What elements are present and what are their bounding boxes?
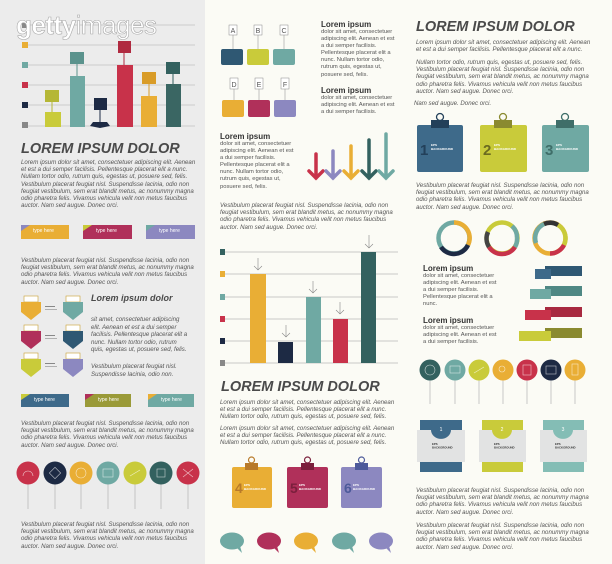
text block right 6 <box>423 316 496 345</box>
clipboards 4-6: BACKGROUND <box>244 487 267 491</box>
clipboards 4-6: 4 <box>235 480 243 496</box>
text: type here <box>34 397 55 403</box>
text block right 2: Vestibulum placerat feugiat nisl. Suspendisse lacinia, odio non <box>416 66 584 73</box>
text block mid 6: et est a dui semper facilisis. Pellentesque placerat elit a nunc. <box>220 432 386 439</box>
text block right 2 <box>416 59 589 95</box>
chart: 3D bar chart <box>22 22 195 128</box>
text block left 2: auctor. Nam sed augue. Donec orci. <box>21 279 118 286</box>
clipboards 1-3: EPS <box>494 143 500 147</box>
text block left 4: odio pharetra felis. Vivamus vehicula velit non metus faucibus <box>21 535 187 542</box>
text block right 4: odio pharetra felis. Vivamus vehicula velit non metus faucibus <box>416 196 582 203</box>
text: type here <box>33 228 54 234</box>
numbered cards: EPS <box>494 442 500 446</box>
text block right 3: Nam sed augue. Donec orci. <box>414 100 491 107</box>
text block mid 2: Lorem ipsum <box>321 86 371 95</box>
text block left 1: Vestibulum placerat feugiat nisl. Suspendisse lacinia, odio non <box>21 181 189 188</box>
text block right 5: dolor sit amet, consectetuer <box>423 273 494 279</box>
clipboards 1-3: 2 <box>483 142 491 159</box>
text block right 5: a dui semper facilisis. <box>423 287 478 293</box>
text block mid 3: posuere sed, felis. <box>220 184 267 190</box>
numbered cards <box>417 420 587 472</box>
text block right 5: Pellentesque placerat elit a <box>423 294 493 300</box>
left panel background <box>0 0 205 564</box>
text block left 1: odio pharetra felis. Vivamus vehicula velit non metus faucibus <box>21 195 187 202</box>
clipboards 1-3: 3 <box>545 142 553 159</box>
tag labels row 2 <box>34 397 182 403</box>
watermark: gettyimages <box>16 10 156 40</box>
text block mid 4: auctor. Nam sed augue. Donec orci. <box>220 224 317 231</box>
text block left 4 <box>21 521 194 550</box>
text block left 2: Vestibulum placerat feugiat nisl. Suspendisse lacinia, odio non <box>21 257 189 264</box>
middle bar chart <box>220 235 398 366</box>
text block right 5: Lorem ipsum <box>423 264 473 273</box>
clipboards 4-6: BACKGROUND <box>299 487 322 491</box>
text block right 4 <box>416 182 589 211</box>
text block left 3 <box>21 420 194 449</box>
text block right 7: auctor. Nam sed augue. Donec orci. <box>416 509 513 516</box>
cubes A-F: F <box>283 82 287 89</box>
text block right 5 <box>423 264 496 307</box>
text block right 1 <box>416 39 590 53</box>
text block right 2: odio pharetra felis. Vivamus vehicula velit non metus faucibus <box>416 81 582 88</box>
cubes A-F: B <box>256 28 261 35</box>
text block right 6: Lorem ipsum <box>423 316 473 325</box>
text block left 1: Lorem ipsum dolor sit amet, consectetuer adipiscing elit. Aenean <box>21 159 195 166</box>
numbered cards: EPS <box>555 442 561 446</box>
numbered cards: BACKGROUND <box>494 446 515 450</box>
down arrows <box>309 134 393 178</box>
text block mid 1: Pellentesque placerat elit a <box>321 50 391 56</box>
numbered cards: EPS <box>432 442 438 446</box>
subheading left: Lorem ipsum dolor <box>91 293 173 303</box>
clipboards 1-3 <box>417 114 589 172</box>
text block mid 2: a dui semper facilisis. <box>321 109 376 115</box>
clipboards 1-3: EPS <box>431 143 437 147</box>
cubes A-F: A <box>231 28 236 35</box>
text block right 7 <box>416 487 589 516</box>
text block left 4: feugiat vestibulum, sem erat blandit metus, ac nonummy magna <box>21 528 194 535</box>
text block mid 6: Nullam tortor odio, rutrum quis, egestas ut, posuere sed, felis. <box>220 439 386 446</box>
clipboards 4-6: EPS <box>299 483 305 487</box>
shield icons <box>21 296 83 377</box>
text block right 2: feugiat vestibulum, sem erat blandit metus, ac nonummy magna <box>416 73 589 80</box>
text block mid 2 <box>321 86 394 115</box>
text block right 7: feugiat vestibulum, sem erat blandit metus, ac nonummy magna <box>416 494 589 501</box>
tag labels row 1 <box>33 228 180 234</box>
ribbons <box>519 266 582 341</box>
ring charts <box>438 222 566 254</box>
text block right 4: Vestibulum placerat feugiat nisl. Suspendisse lacinia, odio non <box>416 182 584 189</box>
text block mid 1: adipiscing elit. Aenean et est <box>321 36 394 42</box>
text block mid 3: dolor sit amet, consectetuer <box>220 141 291 147</box>
text block mid 1: posuere sed, felis. <box>321 72 368 78</box>
text block right 8: Vestibulum placerat feugiat nisl. Suspendisse lacinia, odio non <box>416 522 584 529</box>
text block mid 1: rutrum quis, egestas ut, <box>321 64 382 70</box>
text block mid 4: odio pharetra felis. Vivamus vehicula velit non metus faucibus <box>220 216 386 223</box>
text block mid 3: rutrum quis, egestas ut, <box>220 176 281 182</box>
text block mid 5: et est a dui semper facilisis. Pellentesque placerat elit a nunc. <box>220 406 386 413</box>
text block mid 3: a dui semper facilisis. <box>220 155 275 161</box>
text block mid 3: nunc. Nullam tortor odio, <box>220 169 283 175</box>
text block mid 3: adipiscing elit. Aenean et est <box>220 148 293 154</box>
text block right 4: auctor. Nam sed augue. Donec orci. <box>416 204 513 211</box>
text block right 2: Nullam tortor odio, rutrum quis, egestas ut, posuere sed, felis. <box>416 59 582 66</box>
text block shield 2: Suspendisse lacinia, odio non. <box>91 371 173 378</box>
cubes A-F: D <box>231 82 237 89</box>
text block left 3: Vestibulum placerat feugiat nisl. Suspendisse lacinia, odio non <box>21 420 189 427</box>
cubes A-F <box>221 25 296 117</box>
clipboards 1-3: 1 <box>420 142 428 159</box>
text block left 1: et est a dui semper facilisis. Pellentesque placerat elit a nunc. <box>21 166 187 173</box>
text block mid 6: Lorem ipsum dolor sit amet, consectetuer adipiscing elit. Aenean <box>220 425 394 432</box>
text block mid 5: Lorem ipsum dolor sit amet, consectetuer adipiscing elit. Aenean <box>220 399 394 406</box>
heading mid: LOREM IPSUM DOLOR <box>221 379 380 395</box>
text block mid 1: nunc. Nullam tortor odio, <box>321 57 384 63</box>
text block mid 4: Vestibulum placerat feugiat nisl. Suspendisse lacinia, odio non <box>220 202 388 209</box>
right icon circles with pins <box>420 360 586 404</box>
text block mid 3: Lorem ipsum <box>220 132 270 141</box>
text block mid 4: feugiat vestibulum, sem erat blandit metus, ac nonummy magna <box>220 209 393 216</box>
clipboards 1-3: BACKGROUND <box>556 147 579 151</box>
cubes A-F: C <box>281 28 287 35</box>
speech bubbles <box>220 532 393 553</box>
text block left 3: auctor. Nam sed augue. Donec orci. <box>21 442 118 449</box>
text block left 2: feugiat vestibulum, sem erat blandit metus, ac nonummy magna <box>21 264 194 271</box>
numbered cards: BACKGROUND <box>432 446 453 450</box>
left tags row 2 <box>21 394 194 407</box>
text: type here <box>98 397 119 403</box>
numbered cards: 1 <box>440 427 443 433</box>
text block shield <box>91 316 187 353</box>
text block right 1: et est a dui semper facilisis. Pellentesque placerat elit a nunc. <box>416 46 582 53</box>
text block right 7: odio pharetra felis. Vivamus vehicula velit non metus faucibus <box>416 501 582 508</box>
clipboards 4-6: BACKGROUND <box>353 487 376 491</box>
heading right: LOREM IPSUM DOLOR <box>416 19 575 35</box>
clipboards 4-6: 5 <box>290 480 298 496</box>
clipboards 4-6: 6 <box>344 480 352 496</box>
numbered cards: 3 <box>562 427 565 433</box>
text block left 1: feugiat vestibulum, sem erat blandit metus, ac nonummy magna <box>21 188 194 195</box>
text block left 1: auctor. Nam sed augue. Donec orci. <box>21 202 118 209</box>
text block left 1: Nullam tortor odio, rutrum quis, egestas ut, posuere sed, felis. <box>21 173 187 180</box>
text block shield: elit. Aenean et est a dui semper <box>91 324 176 331</box>
text block mid 3 <box>220 132 294 190</box>
text block left 2: odio pharetra felis. Vivamus vehicula velit non metus faucibus <box>21 271 187 278</box>
text block right 8: auctor. Nam sed augue. Donec orci. <box>416 544 513 551</box>
text block right 4: feugiat vestibulum, sem erat blandit metus, ac nonummy magna <box>416 189 589 196</box>
clipboards 4-6: EPS <box>353 483 359 487</box>
text block right 1: Lorem ipsum dolor sit amet, consectetuer adipiscing elit. Aenean <box>416 39 590 46</box>
text block shield: facilisis. Pellentesque placerat elit a <box>91 331 187 338</box>
text block shield: sit amet, consectetuer adipiscing <box>91 316 179 323</box>
text block mid 3: Pellentesque placerat elit a <box>220 162 290 168</box>
text block mid 5 <box>220 399 394 420</box>
clipboards 1-3: BACKGROUND <box>494 147 517 151</box>
text block right 2: auctor. Nam sed augue. Donec orci. <box>416 88 513 95</box>
text block right 8 <box>416 522 589 551</box>
text block mid 2: dolor sit amet, consectetuer <box>321 95 392 101</box>
text block mid 1 <box>321 20 394 78</box>
text block right 5: adipiscing elit. Aenean et est <box>423 280 496 286</box>
clipboards 4-6: EPS <box>244 483 250 487</box>
text block left 3: odio pharetra felis. Vivamus vehicula velit non metus faucibus <box>21 434 187 441</box>
numbered cards: 2 <box>501 427 504 433</box>
left tags row 1 <box>21 225 195 239</box>
text block mid 1: a dui semper facilisis. <box>321 43 376 49</box>
text block left 4: Vestibulum placerat feugiat nisl. Suspendisse lacinia, odio non <box>21 521 189 528</box>
text: type here <box>161 397 182 403</box>
text block left 1 <box>21 159 195 209</box>
text: type here <box>96 228 117 234</box>
text block mid 1: dolor sit amet, consectetuer <box>321 29 392 35</box>
text block shield 2: Vestibulum placerat feugiat nisl. <box>91 363 177 370</box>
clipboards 4-6 <box>232 457 382 508</box>
text block right 5: nunc. <box>423 301 437 307</box>
text block right 7: Vestibulum placerat feugiat nisl. Suspendisse lacinia, odio non <box>416 487 584 494</box>
icon circles with pins (left) <box>16 462 200 509</box>
text block right 6: dolor sit amet, consectetuer <box>423 325 494 331</box>
text block mid 2: adipiscing elit. Aenean et est <box>321 102 394 108</box>
text block shield 2 <box>91 363 177 378</box>
cubes A-F: E <box>257 82 262 89</box>
clipboards 1-3: BACKGROUND <box>431 147 454 151</box>
text block shield: nunc. Nullam tortor odio, rutrum <box>91 339 177 346</box>
text: type here <box>159 228 180 234</box>
text block mid 6 <box>220 425 394 446</box>
text block left 3: feugiat vestibulum, sem erat blandit metus, ac nonummy magna <box>21 427 194 434</box>
text block left 2 <box>21 257 194 286</box>
text block mid 1: Lorem ipsum <box>321 20 371 29</box>
heading left: LOREM IPSUM DOLOR <box>21 141 180 157</box>
numbered cards: BACKGROUND <box>555 446 576 450</box>
text block left 4: auctor. Nam sed augue. Donec orci. <box>21 543 118 550</box>
text block shield: quis, egestas ut, posuere sed, felis. <box>91 346 187 353</box>
text block right 8: feugiat vestibulum, sem erat blandit metus, ac nonummy magna <box>416 529 589 536</box>
clipboards 1-3: EPS <box>556 143 562 147</box>
text block right 6: adipiscing elit. Aenean et est <box>423 332 496 338</box>
text block mid 4 <box>220 202 393 231</box>
text block right 6: a dui semper facilisis. <box>423 339 478 345</box>
text block mid 5: Nullam tortor odio, rutrum quis, egestas ut, posuere sed, felis. <box>220 413 386 420</box>
text block right 8: odio pharetra felis. Vivamus vehicula velit non metus faucibus <box>416 536 582 543</box>
